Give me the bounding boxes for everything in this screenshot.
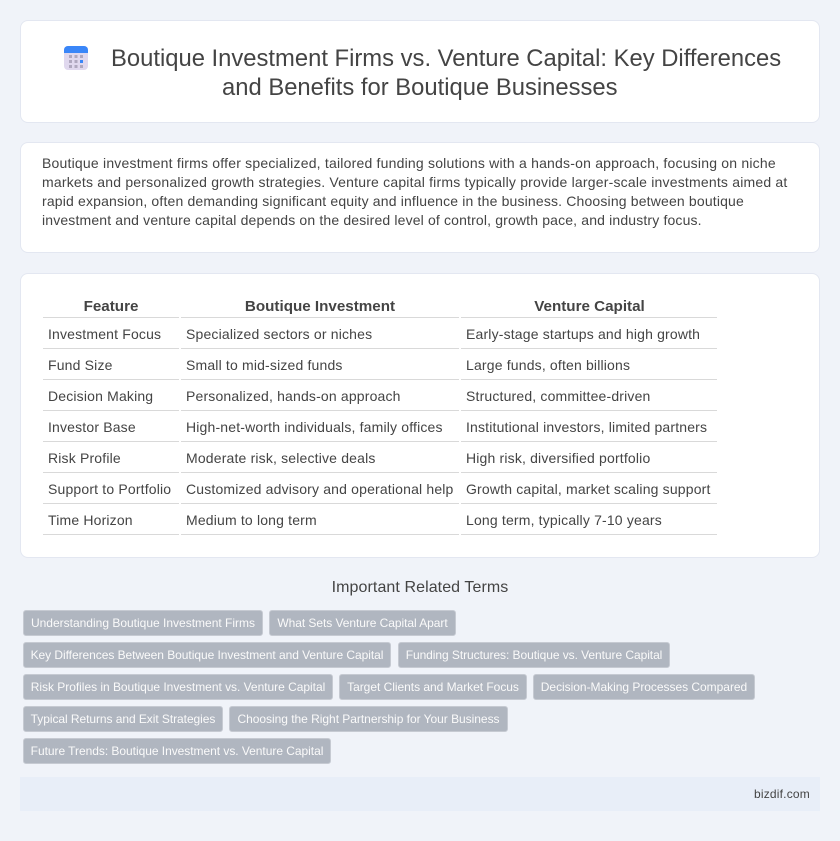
heading: related terms: Important Related Terms [332,579,508,596]
tags: related terms: Future Trends: Boutique Investment vs. Venture Capital [31,744,323,758]
title: and Benefits for Boutique Businesses [222,74,618,101]
comparison table: Structured, committee-driven [466,388,650,404]
text block: intro [42,155,788,228]
comparison table: Feature [84,298,138,315]
tags: related terms: Choosing the Right Partnership for Your Business [237,712,500,726]
tags: related terms: Typical Returns and Exit Strategies [31,712,215,726]
comparison table: Specialized sectors or niches [186,326,372,342]
comparison table: Decision Making [48,388,153,404]
text block: intro: investment and venture capital depends on the desired level of control, growth pace, and industry focus. [42,212,702,228]
tags: related terms: Key Differences Between Boutique Investment and Venture Capital [31,648,383,662]
tags: related terms: What Sets Venture Capital Apart [277,616,448,630]
comparison table: Early-stage startups and high growth [466,326,700,342]
tags: related terms [23,610,755,764]
comparison table: Venture Capital [534,298,645,315]
comparison table: Large funds, often billions [466,357,630,373]
title: Boutique Investment Firms vs. Venture Capital: Key Differences [111,45,781,72]
footer [20,777,820,811]
title [111,45,781,101]
comparison table: Moderate risk, selective deals [186,450,376,466]
comparison table: Growth capital, market scaling support [466,481,711,497]
comparison table: Fund Size [48,357,113,373]
comparison table: High-net-worth individuals, family offices [186,419,443,435]
comparison table: Investment Focus [48,326,161,342]
comparison table: Small to mid-sized funds [186,357,343,373]
text block: intro: markets and personalized growth strategies. Venture capital firms typically provide larger-scale investments aimed at [42,174,788,190]
icon: calendar [64,46,88,70]
comparison table [43,298,717,535]
tags: related terms: Risk Profiles in Boutique Investment vs. Venture Capital [31,680,325,694]
tags: related terms: Target Clients and Market Focus [347,680,519,694]
comparison table: Support to Portfolio [48,481,171,497]
comparison table: Boutique Investment [245,298,395,315]
text block: intro: rapid expansion, often demanding significant equity and influence in the business. Choosing between boutique [42,193,744,209]
comparison table: High risk, diversified portfolio [466,450,650,466]
comparison table: Medium to long term [186,512,317,528]
tags: related terms: Funding Structures: Boutique vs. Venture Capital [406,648,662,662]
comparison table: Institutional investors, limited partners [466,419,707,435]
comparison table: Investor Base [48,419,136,435]
comparison table: Customized advisory and operational help [186,481,454,497]
comparison table: Personalized, hands-on approach [186,388,401,404]
tags: related terms: Understanding Boutique Investment Firms [31,616,255,630]
panel: comparison table [20,273,820,558]
panel: intro text [20,142,820,253]
text block: intro: Boutique investment firms offer specialized, tailored funding solutions with a hands-on approach, focusing on niche [42,155,776,171]
comparison table: Long term, typically 7-10 years [466,512,662,528]
comparison table: Risk Profile [48,450,121,466]
panel: header [20,20,820,123]
tags: related terms: Decision-Making Processes Compared [541,680,747,694]
footer credit: bizdif.com [754,787,810,801]
comparison table: Time Horizon [48,512,133,528]
